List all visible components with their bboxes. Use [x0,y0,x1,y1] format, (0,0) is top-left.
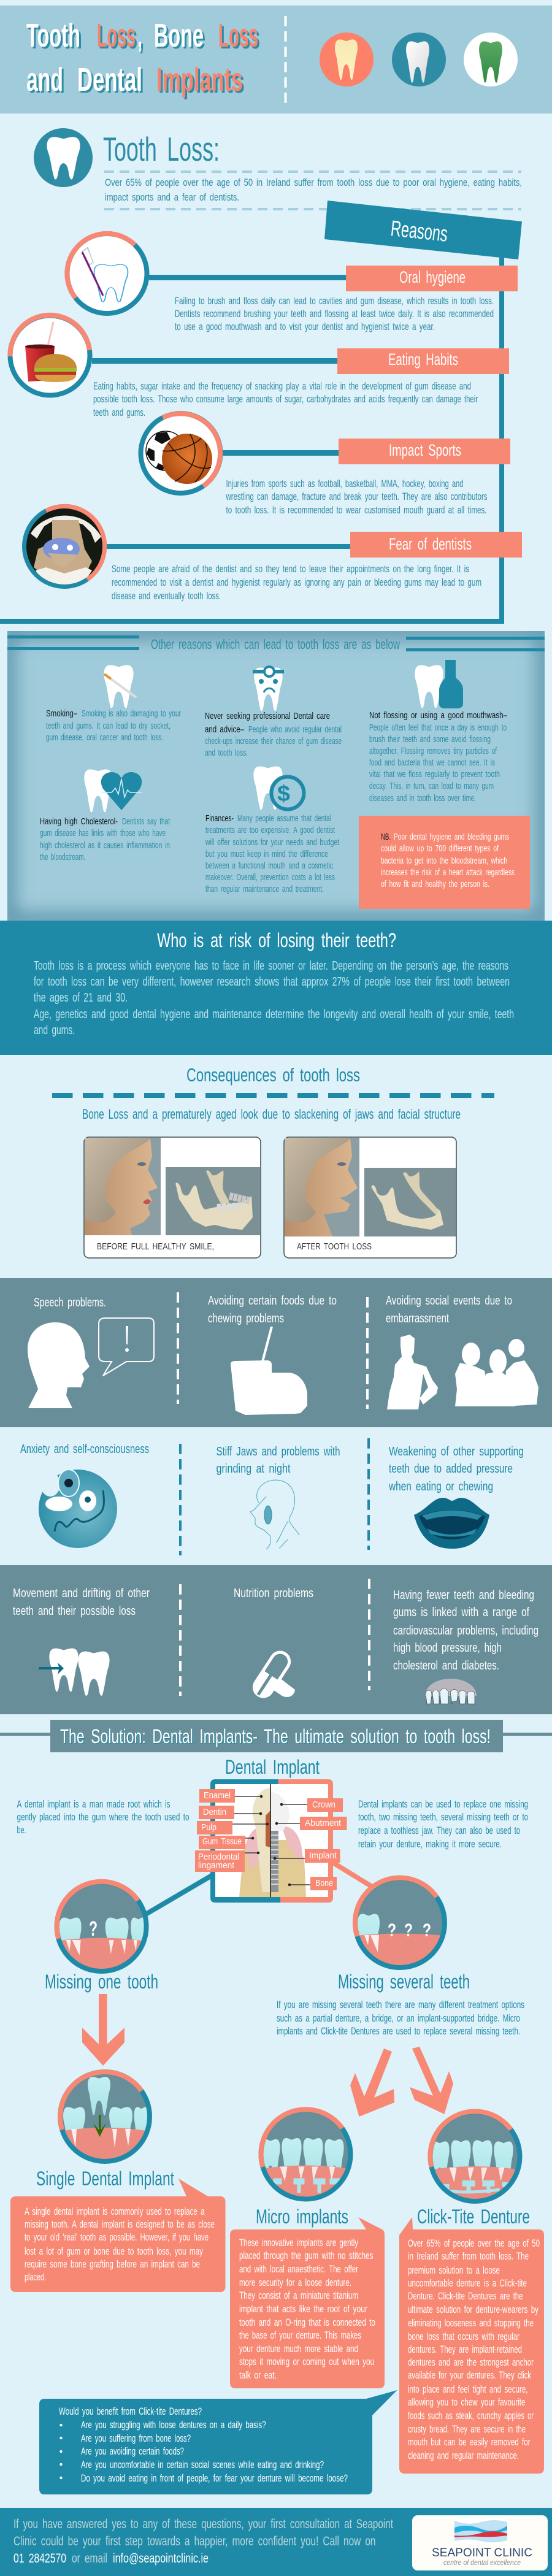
diagram labels: Dentin [203,1807,226,1817]
item: cardiovascular [393,1589,539,1704]
title: , [137,17,142,54]
callout: micro implants: talk or eat. [239,2370,277,2381]
panel: fear of dentists [25,507,522,602]
text: finances: between a functional mouth and a cosmetic [205,861,333,871]
callout: click-tite denture: premium solution to a loose [408,2265,500,2276]
callout: micro implants: placed through the gum with no stitches [239,2250,373,2261]
text: call to action [13,2517,393,2566]
text: smoking [46,708,181,743]
text: call to action: info@seapointclinic.ie [113,2551,209,2566]
item: cardiovascular: high blood pressure, high [393,1641,502,1655]
panel: consequences band 1 [0,1278,552,1427]
diagram labels: Bone [315,1878,333,1888]
diagram labels: lingament [198,1860,235,1871]
diagram labels: Pulp [201,1822,217,1833]
heading: single dental implant: Single Dental Implant [36,2168,174,2190]
diagram labels: Enamel [204,1790,231,1801]
icon: missing several teeth mouth [354,1877,446,1969]
icon: click-tite denture mouth [429,2110,521,2202]
diagram labels: Implant [309,1850,337,1861]
icon: dentist inside mouth [25,507,104,586]
banner: reasons [324,201,522,259]
text: not flossing: diseases and in tooth loss over time. [369,793,476,803]
image: after tooth loss [284,1137,456,1258]
text: finances: will offer solutions for your needs and budget [205,837,340,848]
text: cholesterol: gum disease has links with those who have [40,828,166,838]
item: avoiding social events [386,1294,539,1409]
label: oral hygiene: Oral hygiene [399,268,466,286]
title: Dental [77,61,142,98]
leader lines [232,1795,310,1886]
diagram labels: Crown [312,1800,335,1810]
text: not flossing: brush their teeth and some avoid flossing [369,734,491,745]
icon: toothbrush and tooth [67,234,147,313]
image: before tooth loss [84,1137,261,1258]
text: never seeking care: and tooth loss. [205,748,248,758]
callout: single dental implant: to your old ‘real’ tooth as possible. However, if you have [25,2232,209,2243]
callout: single dental implant: lost a lot of gum or bone due to tooth loss, you may [25,2246,204,2257]
item: speech problems [28,1296,154,1408]
icon: green tooth in white circle [464,33,518,86]
icon: sad tooth with head mirror [253,667,284,711]
item: speech problems: Speech problems. [34,1296,106,1309]
item: movement of teeth: teeth and their possible loss [13,1604,136,1618]
text: cholesterol: high cholesterol as it causes inflammation in [40,840,170,851]
text: not flossing [369,710,507,803]
text: call to action: Clinic could be your first step towards a happier, more confident you! Call now on [13,2534,375,2548]
text: finances: but you must keep in mind the difference [205,849,328,859]
text: cholesterol: the bloodstream. [40,852,85,862]
icon: cream tooth in coral circle [320,33,374,86]
callout: NB [359,816,530,909]
panel: footer [0,2508,552,2576]
label: oral hygiene [346,266,518,291]
label: impact sports: Impact Sports [389,441,461,459]
heading: the solution [0,1720,552,1752]
icon: missing several teeth mouth: ? [388,1920,396,1941]
callout: micro implants: These innovative implants are gently [239,2237,359,2248]
callout: would you benefit: Do you avoid eating in front of people, for fear your denture will become loose? [81,2473,348,2484]
item: avoiding certain foods: chewing problems [208,1312,284,1325]
icon: micro implants mouth [260,2109,352,2201]
icon: football and basketball [141,413,221,493]
item: nutrition problems: Nutrition problems [234,1587,313,1600]
text: dental implant left: be. [17,1825,26,1836]
arrow: to micro implants [350,2049,394,2117]
item: cardiovascular: cholesterol and diabetes. [393,1659,499,1673]
callout: micro implants: more security for a loose denture. [239,2277,351,2288]
item: weakening of teeth [388,1445,524,1549]
text: eating habits: teeth and gums. [93,407,145,418]
diagram labels: Abutment [305,1818,342,1828]
panel: consequences heading [52,1064,494,1122]
heading: who is at risk: Who is at risk of losing their teeth? [157,929,396,951]
text: never seeking care: Never seeking professional Dental care [205,711,330,721]
text: oral hygiene [175,296,494,332]
item: movement of teeth: Movement and drifting of other [13,1587,150,1600]
text: cholesterol: Having high Cholesterol- [40,816,118,827]
text: cholesterol: Dentists say that [122,816,171,827]
arrow: down to single implant [82,1994,125,2066]
label: fear of dentists: Fear of dentists [389,535,472,553]
item: movement of teeth [13,1587,150,1696]
item: avoiding certain foods: Avoiding certain foods due to [208,1294,337,1308]
callout: would you benefit [39,2390,397,2494]
item: avoiding social events: Avoiding social events due to [386,1294,512,1308]
text: who is at risk: the ages of 21 and 30. [34,991,128,1005]
heading: other reasons: Other reasons which can lead to tooth loss are as below [151,637,400,652]
title: Bone [154,17,204,54]
icon: tooth with heart [84,769,142,812]
diagram: dental implant [195,1779,347,1903]
panel: tooth loss intro [34,128,522,209]
heading: micro implants: Micro implants [256,2206,348,2228]
text: call to action: 01 2842570 [13,2551,66,2566]
text: finances: makeover. Overall, prevention costs a lot less [205,872,335,883]
callout: single dental implant [10,2179,226,2292]
callout: single dental implant: placed. [25,2272,46,2283]
icon: tooth with mouthwash bottle [415,660,463,708]
text: finances: Finances- [205,813,234,824]
text: finances [205,813,340,894]
item: stiff jaws: Stiff Jaws and problems with [216,1445,340,1459]
item: stiff jaws [216,1445,340,1549]
text: impact sports [226,478,487,516]
text: never seeking care: check-ups increase their chance of gum disease [205,736,342,746]
title: Tooth [26,17,80,54]
logo: seapoint clinic [412,2515,548,2570]
text: call to action: or email [72,2551,107,2566]
text: fear of dentists: disease and eventually tooth loss. [112,591,221,602]
panel: consequences band 2 [0,1565,552,1714]
arrow: to click-tite denture [410,2047,453,2114]
panel: header [0,6,552,113]
callout: NB: could allow up to 700 different types of [381,843,499,854]
callout: click-tite denture [399,2217,544,2474]
text: smoking: Smoking– [46,708,78,719]
item: stiff jaws: grinding at night [216,1462,291,1476]
icon: missing one tooth mouth: ? [89,1917,98,1941]
callout: micro implants: and with local anaesthetic. The offer [239,2264,358,2275]
callout: micro implants: tooth and an O-ring that is connected to [239,2317,375,2328]
icon: missing several teeth mouth: ? [404,1920,413,1941]
panel: who is at risk [0,921,552,1055]
intro text [105,177,522,203]
text: smoking: teeth and gums. It can lead to dry socket, [46,721,171,731]
icon: smoking tooth [104,665,136,708]
callout: single dental implant: missing tooth. A dental implant is designed to be as close [25,2219,215,2230]
label: eating habits [337,348,509,374]
title: Implants [156,61,243,98]
heading: dental implant: Dental Implant [225,1756,320,1778]
text: not flossing: food and bacteria that we cannot see. It is [369,757,495,768]
icon: single implant mouth [59,2071,151,2163]
text: dental implant left [17,1799,189,1836]
text: who is at risk: and gums. [34,1024,75,1037]
callout: micro implants: implant that acts like the root of your [239,2304,367,2315]
diagram labels [195,1789,347,1890]
callout: NB: NB. [381,832,391,842]
text: eating habits [93,381,478,418]
heading: tooth loss: Tooth Loss: [103,130,220,168]
text: finances: than regular maintenance and treatment. [205,884,324,894]
item: weakening of teeth: when eating or chewing [388,1480,493,1493]
image: after tooth loss: AFTER TOOTH LOSS [297,1241,372,1252]
intro text: impact sports and a fear of dentists. [105,192,239,203]
text: dental implant right [358,1799,528,1850]
timeline: vertical and bottom bars [0,258,504,624]
heading: consequences: Consequences of tooth loss [186,1064,360,1086]
item: weakening of teeth: teeth due to added pressure [389,1462,513,1476]
text: finances: Many people assume that dental [237,813,331,824]
callout: would you benefit: Would you benefit from Click-tite Dentures? [59,2406,202,2417]
text: not flossing: decay. This, in turn, can lead to many gum [369,781,494,791]
logo: seapoint clinic: centre of dental excellence [443,2558,521,2567]
text: fear of dentists [112,564,481,602]
icon: burger and drink [10,315,90,395]
diagram labels: Gum Tissue [202,1836,242,1847]
text: finances: treatments are too expensive. A good dentist [205,825,335,835]
callout: NB: of how fit and healthy the person is. [381,879,489,889]
heading: missing one tooth: Missing one tooth [45,1971,158,1993]
icon: missing one tooth mouth [56,1880,148,1972]
callout: single dental implant: A single dental implant is commonly used to replace a [25,2206,205,2217]
callout: micro implants [230,2217,385,2388]
text: smoking: gum disease, oral cancer and tooth loss. [46,732,163,743]
callout: single dental implant: require some bone grafting before an implant can be [25,2259,200,2270]
callout: would you benefit: Are you avoiding certain foods? [81,2446,184,2457]
text: never seeking care: People who avoid regular dental [248,724,342,735]
image: before tooth loss: BEFORE FULL HEALTHY SMILE, [97,1241,214,1252]
text: call to action: If you have answered yes to any of these questions, your first consultation at Seapoint [13,2517,393,2531]
panel: impact sports [141,413,510,516]
diagram labels: Periodontal [198,1852,239,1862]
item: anxiety [20,1443,149,1548]
callout: micro implants: your denture much more stable and [239,2344,358,2355]
text: never seeking care [205,711,342,758]
label: fear of dentists [350,532,522,558]
text: missing several teeth [277,1999,524,2037]
text: oral hygiene: to use a good mouthwash and to visit your dentist and hygienist twice a year. [175,321,435,332]
callout: micro implants: They consist of a miniature titanium [239,2290,358,2301]
panel: other reasons [7,631,545,921]
text: smoking: Smoking is also damaging to your [82,708,181,719]
icon: tooth with dollar coin [253,766,306,811]
callout: would you benefit: Are you uncomfortable in certain social scenes while eating and drinking? [81,2459,324,2471]
text: cholesterol [40,816,171,862]
panel: consequences row 2 [20,1438,524,1555]
callout: micro implants: stops it moving or coming out when you [239,2356,374,2367]
item: avoiding certain foods [208,1294,337,1415]
title: Loss [218,17,258,54]
panel: eating habits [10,315,509,418]
callout: micro implants: the base of your denture. This makes [239,2330,361,2341]
title [26,17,258,98]
text: who is at risk [34,959,514,1037]
title: Loss [97,17,136,54]
callout: would you benefit: Are you struggling with loose dentures on a daily basis? [81,2420,266,2431]
icon: tooth with dollar coin: $ [277,781,290,806]
callout: would you benefit: Are you suffering from bone loss? [81,2433,191,2444]
connectors from diagram [145,1863,373,1915]
text: not flossing: vital that we floss regularly to prevent tooth [369,769,500,780]
text: dental implant left: gently placed into the gum where the tooth used to [17,1812,189,1823]
label: eating habits: Eating Habits [388,350,458,369]
item: avoiding social events: embarrassment [386,1312,449,1325]
item: nutrition problems [234,1587,313,1700]
text: dental implant left: A dental implant is a man made root which is [17,1799,171,1810]
banner: reasons: Reasons [389,215,449,247]
icon: white tooth in teal circle [392,33,446,86]
icon: tooth badge [34,128,93,187]
text: never seeking care: and advice– [205,724,244,735]
icon: missing several teeth mouth: ? [423,1920,431,1941]
logo: seapoint clinic: SEAPOINT CLINIC [432,2547,532,2559]
item: anxiety: Anxiety and self-consciousness [20,1443,149,1456]
label: impact sports [339,439,510,464]
title: and [26,61,63,98]
panel: oral hygiene [67,234,518,332]
text: not flossing: Not flossing or using a good mouthwash– [369,710,507,721]
heading: missing several teeth: Missing several teeth [338,1971,470,1993]
